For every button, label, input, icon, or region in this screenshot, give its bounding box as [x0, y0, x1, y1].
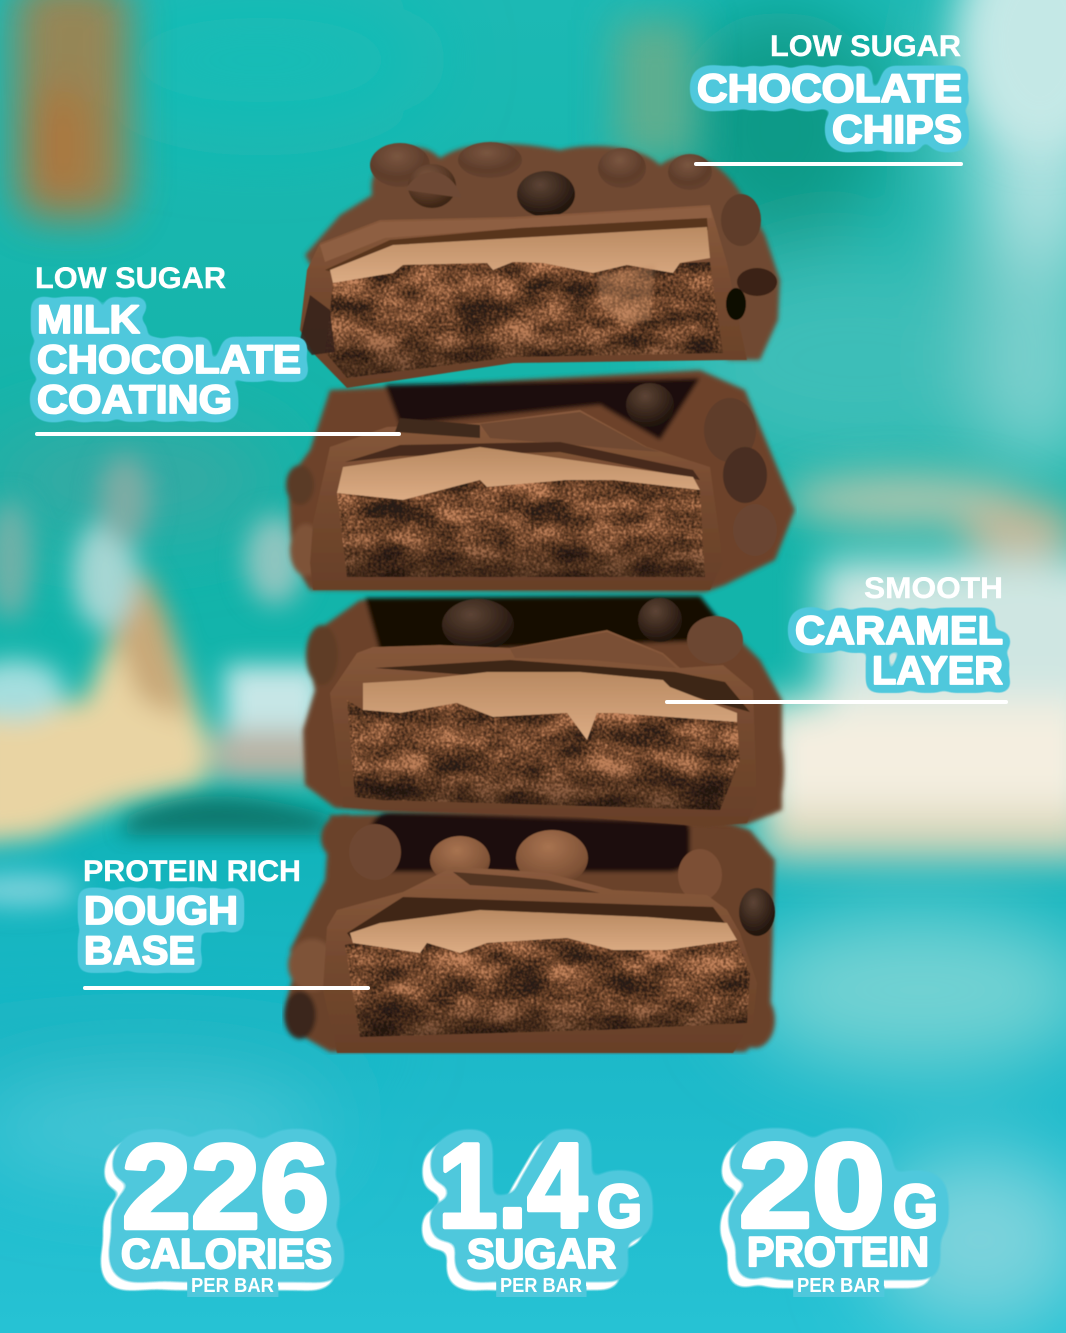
leader line [35, 432, 401, 436]
small label: low sugar: LOW SUGAR [35, 262, 226, 295]
heading: dough base: DOUGH [84, 889, 238, 933]
heading: caramel layer: CARAMEL [795, 609, 1003, 653]
heading: caramel layer: LAYER [872, 649, 1003, 693]
heading: dough base: BASE [84, 929, 195, 973]
callout: dough base [83, 855, 370, 990]
per bar label: PER BAR [500, 1275, 583, 1297]
per bar label: PER BAR [191, 1275, 275, 1297]
callout: milk chocolate coating [35, 262, 401, 436]
small label: protein rich: PROTEIN RICH [83, 855, 301, 888]
callout: chocolate chips [694, 30, 963, 166]
heading: milk chocolate coating: MILK [37, 298, 140, 342]
callout: caramel layer [665, 572, 1008, 704]
bar 2 [286, 370, 795, 592]
heading: milk chocolate coating [37, 298, 301, 422]
bar 1 top [300, 142, 780, 388]
stat: 1.4g sugar [438, 1119, 642, 1297]
leader line [694, 162, 963, 166]
heading: milk chocolate coating: COATING [37, 378, 232, 422]
per bar label: PER BAR [797, 1275, 881, 1297]
stat: 20g protein: 20 [739, 1119, 885, 1253]
leader line [665, 700, 1008, 704]
heading: caramel layer [795, 609, 1003, 693]
bar 4 bottom [284, 812, 775, 1053]
stat: 1.4g sugar: SUGAR [467, 1230, 616, 1277]
leader line [83, 986, 370, 990]
stat: 1.4g sugar: G [597, 1173, 642, 1240]
stat: 226 calories: 226 [122, 1120, 329, 1254]
heading: chocolate chips: CHOCOLATE [697, 67, 962, 111]
stat: 20g protein: PROTEIN [747, 1228, 929, 1275]
heading: chocolate chips [697, 67, 962, 152]
small label: low sugar: LOW SUGAR [770, 30, 961, 63]
stat: 226 calories: CALORIES [121, 1230, 332, 1277]
stat: 1.4g sugar: 1.4 [438, 1119, 587, 1253]
stat: 20g protein [739, 1119, 938, 1297]
heading: milk chocolate coating: CHOCOLATE [37, 338, 301, 382]
heading: dough base [84, 889, 238, 973]
stat: 20g protein: G [893, 1173, 938, 1240]
small label: smooth: SMOOTH [864, 572, 1003, 605]
heading: chocolate chips: CHIPS [832, 108, 962, 152]
bar 3 [303, 596, 784, 827]
stack of four protein bars [284, 142, 795, 1053]
